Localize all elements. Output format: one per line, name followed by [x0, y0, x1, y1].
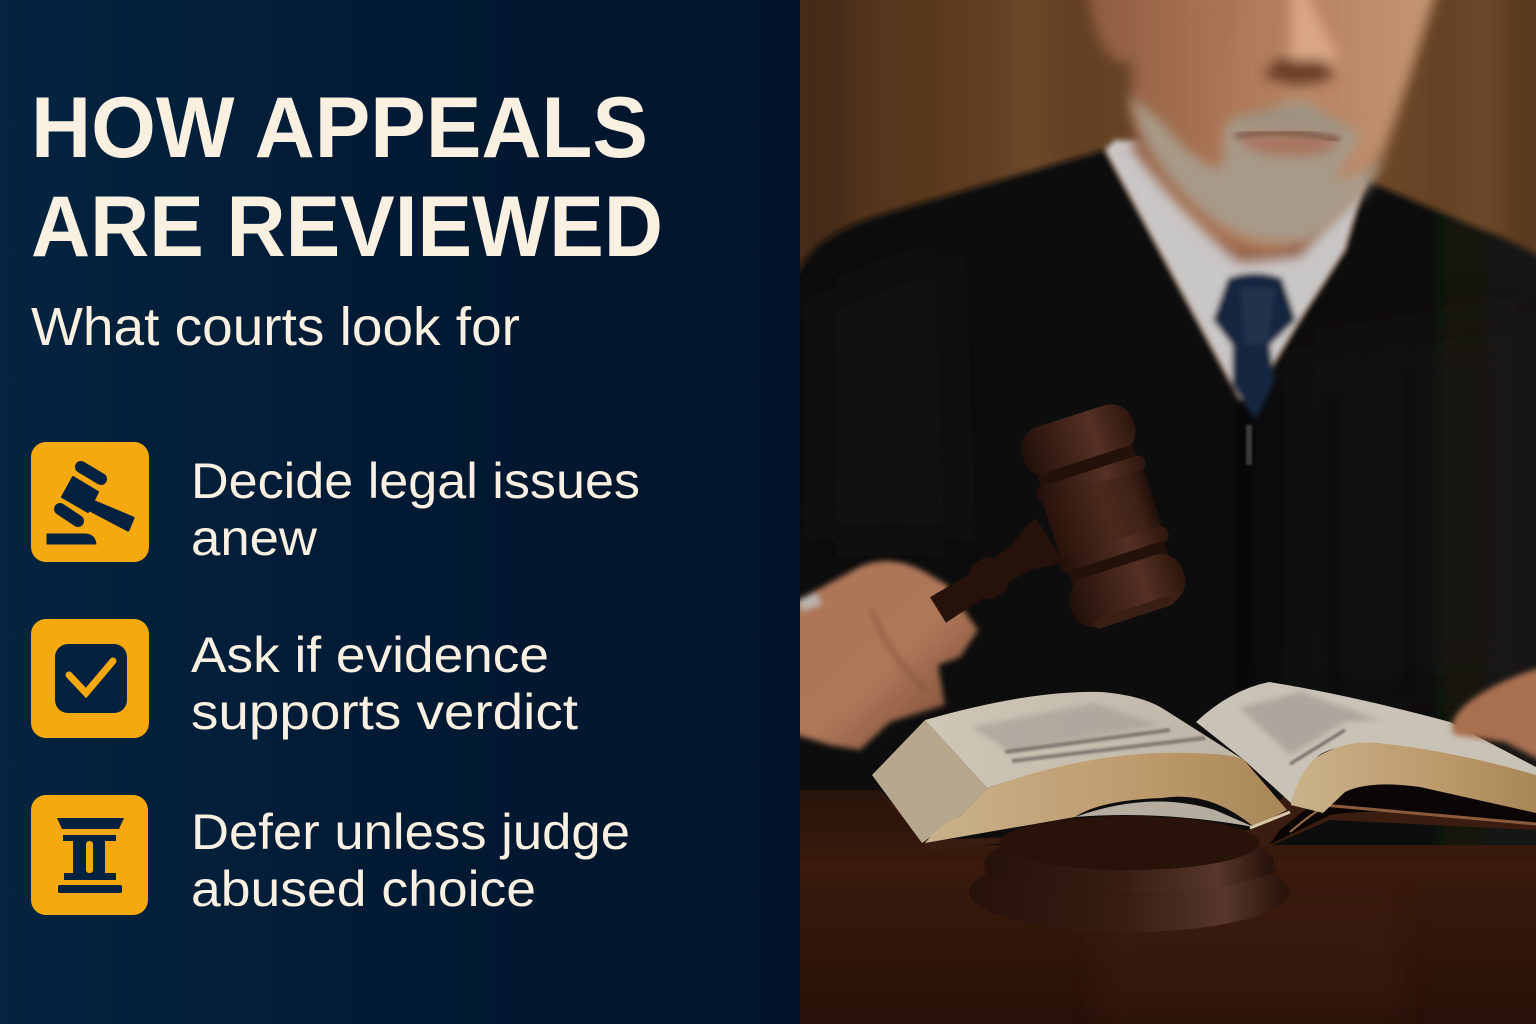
text: evidence [191, 627, 578, 740]
bottom cap [1069, 554, 1186, 627]
sounding block [969, 816, 1289, 932]
right hand on book [1452, 665, 1536, 765]
left page edges [925, 753, 1287, 843]
title: ARE REVIEWED [31, 179, 663, 275]
judge collar and tie [1105, 140, 1365, 420]
panel: navy text panel [0, 0, 800, 1024]
subtitle: What courts look for [31, 297, 520, 357]
judge robe [770, 150, 1536, 880]
text: decide legal issues: anew [191, 510, 318, 566]
icon: checkbox [31, 619, 149, 738]
gavel head [1022, 404, 1186, 628]
icon: gavel [31, 442, 149, 562]
table [790, 790, 1536, 1024]
right page text [1240, 692, 1380, 764]
text: defer: abused choice [191, 861, 536, 917]
judge face [1085, 0, 1440, 262]
list item: decide legal issues [31, 442, 640, 566]
top ring [1034, 454, 1147, 503]
left page text [972, 703, 1205, 761]
centre body [1042, 468, 1163, 562]
left page [925, 692, 1244, 788]
text: evidence: Ask if evidence [191, 627, 549, 683]
open book [870, 682, 1536, 851]
list item: evidence [31, 619, 578, 740]
photo: judge with gavel and book [770, 0, 1536, 1024]
left side pages [872, 720, 987, 843]
lower ring [1059, 526, 1169, 574]
list item: defer [31, 795, 630, 917]
right page edges [1291, 743, 1536, 813]
holding hand [780, 561, 978, 750]
text: decide legal issues [191, 453, 640, 566]
text: evidence: supports verdict [191, 684, 578, 740]
courtroom wall [800, 0, 1536, 401]
text: defer: Defer unless judge [191, 804, 630, 860]
text: decide legal issues: Decide legal issues [191, 453, 640, 509]
title: HOW APPEALS [31, 80, 648, 176]
right page [1196, 682, 1536, 803]
top cap [1022, 404, 1136, 475]
book cover edge [872, 782, 1536, 845]
gavel handle [930, 518, 1061, 623]
icon: column [31, 795, 148, 915]
text: defer [191, 804, 630, 917]
title [31, 80, 663, 275]
